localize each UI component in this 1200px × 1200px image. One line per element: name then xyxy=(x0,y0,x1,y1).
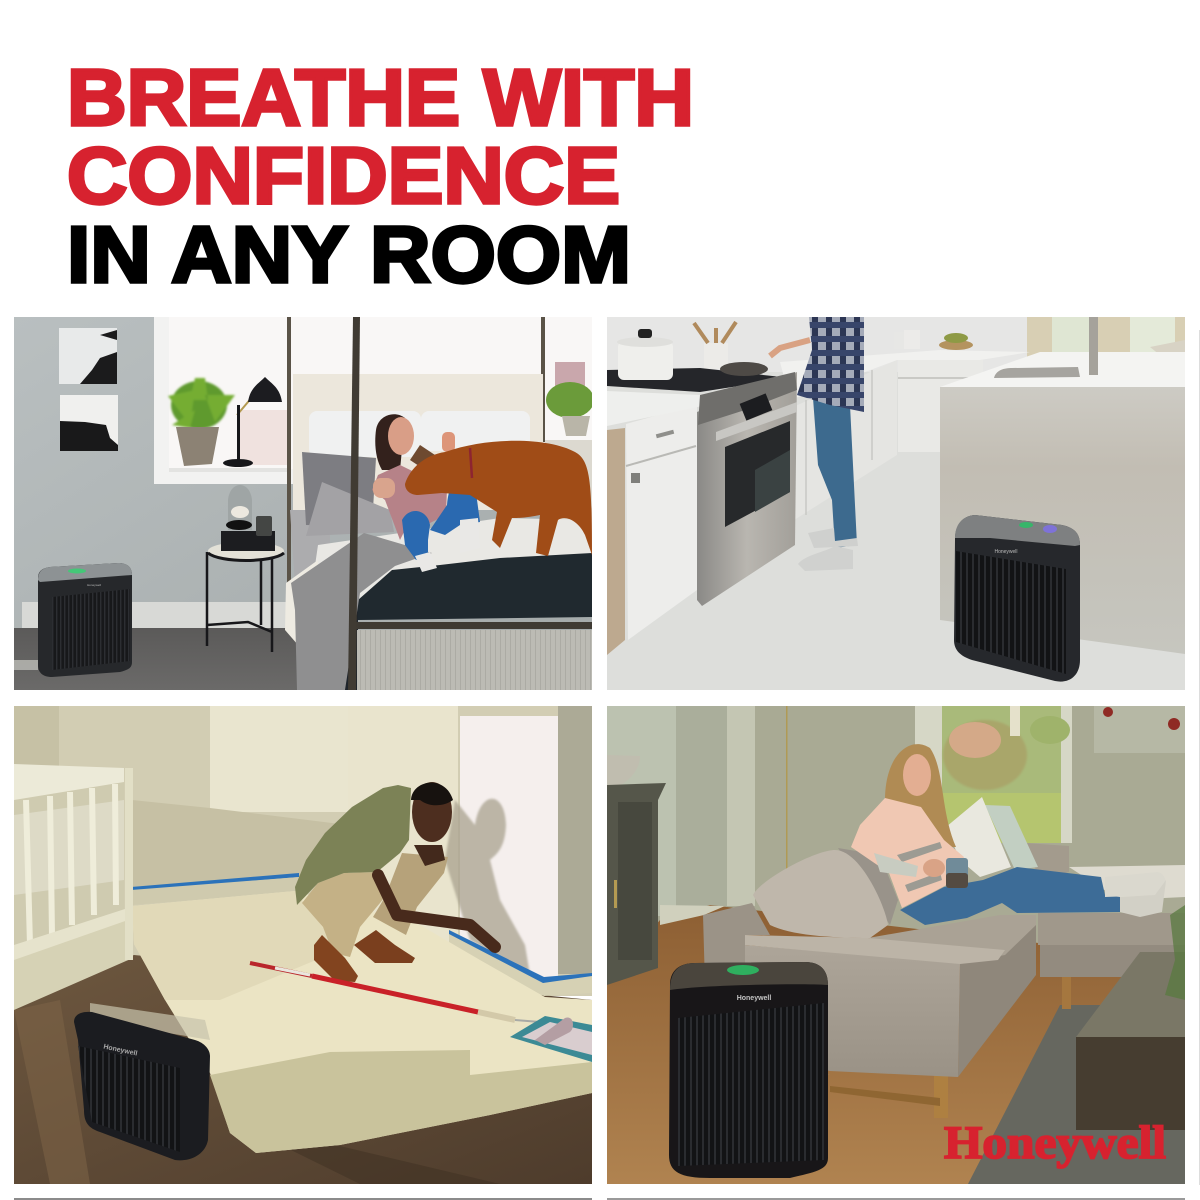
title line: breathe with: BREATHE WITH xyxy=(67,53,694,142)
paint tray and roller xyxy=(510,1016,592,1062)
countertop objects xyxy=(692,320,973,350)
bed xyxy=(285,317,594,690)
dishwasher and cabinet xyxy=(607,391,707,655)
man painting xyxy=(295,782,495,982)
panel: living room photo xyxy=(607,706,1185,1184)
back leg xyxy=(373,853,448,935)
air purifier xyxy=(74,1003,210,1160)
rug xyxy=(968,1005,1185,1184)
front leg xyxy=(302,872,385,957)
white pot on stove xyxy=(617,329,673,380)
woman on bed xyxy=(372,414,480,572)
stove xyxy=(607,368,797,606)
head xyxy=(412,782,452,842)
crib xyxy=(14,764,133,1010)
back right arm and blanket xyxy=(1025,843,1069,880)
front arm top xyxy=(745,935,1005,964)
window xyxy=(154,317,592,484)
cream sheet xyxy=(285,562,316,642)
side view beyond bed xyxy=(555,362,585,386)
navy under throw and blanket xyxy=(345,606,358,690)
wall art xyxy=(1094,706,1185,753)
bed base xyxy=(357,630,592,690)
air purifier: Honeywell xyxy=(103,1044,138,1058)
golden retriever xyxy=(405,441,592,556)
mug and hands xyxy=(923,859,945,877)
paint roller pole xyxy=(250,963,540,1022)
front arm face xyxy=(745,945,960,1077)
air purifier xyxy=(669,962,828,1178)
panel: nursery painting photo xyxy=(14,706,592,1184)
title line: in any room: IN ANY ROOM xyxy=(67,210,631,299)
air purifier: Honeywell xyxy=(87,583,101,587)
panel: kitchen photo xyxy=(607,317,1185,690)
frying pan xyxy=(720,362,768,376)
cabinet and bowl xyxy=(607,755,666,985)
back cabinets xyxy=(780,350,1030,522)
garden window xyxy=(915,706,1072,843)
wall art xyxy=(59,328,118,451)
potted plant xyxy=(168,378,235,466)
title line: confidence: CONFIDENCE xyxy=(67,131,620,220)
woman on sofa xyxy=(851,744,1166,925)
chaise xyxy=(1038,913,1185,945)
air purifier xyxy=(954,515,1080,682)
coffee table xyxy=(1076,905,1185,1130)
front bed post xyxy=(348,317,360,690)
jeans xyxy=(900,867,1120,925)
arm side and left front xyxy=(703,903,830,1075)
drop cloth xyxy=(132,891,592,1153)
floor xyxy=(14,955,592,1184)
seat cushion xyxy=(838,848,898,925)
sectional sofa xyxy=(703,843,1185,1118)
wood floor xyxy=(607,905,1185,1184)
blue masking tape and skirting xyxy=(131,873,592,996)
air purifier: Honeywell xyxy=(737,995,771,1002)
logo: honeywell: Honeywell xyxy=(944,1117,1166,1169)
rear window xyxy=(1027,317,1185,356)
man's wall shadow xyxy=(445,799,530,975)
wall column xyxy=(558,706,592,974)
air purifier: Honeywell xyxy=(994,549,1018,555)
kitchen island xyxy=(940,317,1185,654)
grey throw xyxy=(291,533,432,690)
shoes xyxy=(314,935,358,982)
socks xyxy=(1105,872,1166,897)
air purifier xyxy=(38,563,132,677)
side table with books and cloche xyxy=(207,485,284,652)
title xyxy=(67,53,694,299)
arms xyxy=(414,845,445,866)
sweater xyxy=(851,798,964,908)
olive shirt xyxy=(295,785,411,905)
desk lamp xyxy=(223,377,282,467)
person cooking xyxy=(770,317,864,571)
seat behind xyxy=(868,915,1036,965)
panel: bedroom photo xyxy=(14,317,594,690)
pillows xyxy=(946,797,1038,877)
